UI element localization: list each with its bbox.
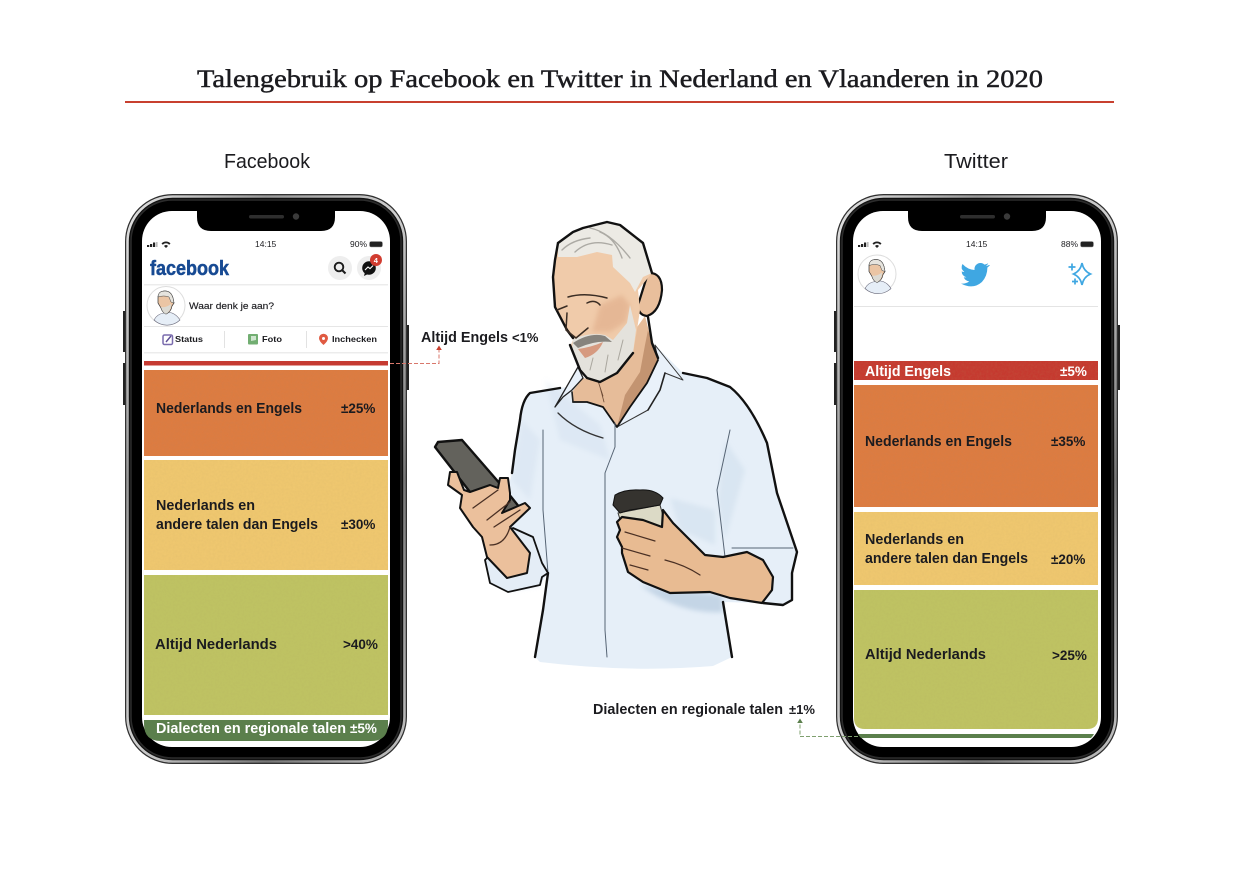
- heading: Twitter: Twitter: [944, 151, 1008, 173]
- bar: Nederlands en andere talen: ±20%: [1051, 552, 1085, 567]
- callout: Altijd Engels: <1%: [512, 330, 539, 345]
- phone: Facebook: [123, 194, 409, 764]
- status bar: 14:15: [255, 239, 277, 249]
- phone frame: [123, 194, 409, 764]
- action: Inchecken: [319, 334, 377, 345]
- bar: Altijd Engels: ±5%: [1060, 364, 1087, 379]
- shirt outline: [512, 373, 797, 657]
- icon: messenger with badge: 4: [374, 256, 379, 265]
- icon: sparkle: [1068, 263, 1090, 285]
- illustration: man with phone and coffee: [435, 222, 797, 669]
- bar: Altijd Nederlands: >25%: [1052, 648, 1087, 663]
- icon: messenger with badge: [357, 254, 382, 280]
- bar: Dialecten: Dialecten en regionale talen: [156, 721, 346, 737]
- bar: Altijd Nederlands: Altijd Nederlands: [865, 647, 986, 663]
- phone in hand: [435, 440, 520, 513]
- avatar: Facebook: [147, 286, 185, 325]
- bar: Altijd Engels: [144, 361, 388, 366]
- phone: Twitter: [834, 194, 1120, 764]
- status bar: [858, 239, 1094, 249]
- callout: Dialecten: [593, 702, 858, 736]
- action: Foto: Foto: [262, 334, 282, 344]
- title: Talengebruik op Facebook en Twitter in Nederland en Vlaanderen in 2020: [197, 66, 1043, 93]
- shirt: [485, 345, 797, 669]
- bar: Dialecten: [858, 734, 1094, 738]
- face outline: [553, 222, 658, 382]
- bar: Altijd Engels: Altijd Engels: [865, 364, 951, 380]
- shirt shading: [495, 380, 745, 612]
- eyes and nose: [557, 295, 607, 338]
- left hand: [448, 472, 530, 578]
- icon: search: [328, 256, 352, 280]
- bar: Nederlands en andere talen: andere talen dan Engels: [156, 517, 318, 533]
- action: Status: Status: [175, 334, 203, 344]
- bar: Nederlands en Engels: [144, 370, 388, 456]
- right hand and forearm: [617, 510, 773, 603]
- status bar: 14:15: [966, 239, 988, 249]
- bar: Nederlands en Engels: [854, 385, 1098, 507]
- action: Status: [163, 334, 203, 344]
- bar: Nederlands en Engels: ±25%: [341, 401, 375, 416]
- bar: Nederlands en andere talen: Nederlands en: [865, 532, 964, 548]
- head: [553, 222, 652, 382]
- bar: Nederlands en andere talen: andere talen dan Engels: [865, 551, 1028, 567]
- ear: [638, 273, 662, 316]
- bar: Altijd Engels: [854, 361, 1098, 380]
- status bar: 90%: [350, 239, 367, 249]
- bar: Nederlands en Engels: ±35%: [1051, 434, 1085, 449]
- neck skin: [572, 316, 658, 427]
- coffee cup: [613, 490, 665, 535]
- face shading: [592, 295, 630, 332]
- status bar: 88%: [1061, 239, 1078, 249]
- left cuff: [485, 528, 548, 592]
- phone frame: [834, 194, 1120, 764]
- callout: Altijd Engels: Altijd Engels: [421, 330, 508, 346]
- callout: Altijd Engels: [390, 330, 539, 364]
- icon: twitter bird: [961, 263, 990, 286]
- collar: [555, 345, 683, 438]
- bar: Dialecten: [144, 720, 388, 741]
- bar: Nederlands en andere talen: Nederlands en: [156, 498, 255, 514]
- bar: Nederlands en Engels: Nederlands en Engels: [156, 401, 302, 417]
- action: Foto: [248, 334, 282, 344]
- hair: [558, 222, 652, 292]
- callout: Dialecten: Dialecten en regionale talen: [593, 702, 783, 718]
- bar: Altijd Nederlands: [854, 590, 1098, 729]
- facebook logo: facebook: [150, 258, 230, 280]
- bar: Nederlands en andere talen: [144, 460, 388, 570]
- bar: Nederlands en Engels: Nederlands en Engels: [865, 434, 1012, 450]
- bar: Altijd Nederlands: Altijd Nederlands: [155, 637, 277, 653]
- beard: [572, 305, 636, 382]
- bar: Altijd Nederlands: >40%: [343, 637, 378, 652]
- callout: Dialecten: ±1%: [789, 702, 815, 717]
- bar: Altijd Nederlands: [144, 575, 388, 715]
- avatar: Twitter: [858, 255, 896, 294]
- action: Inchecken: Inchecken: [332, 334, 377, 344]
- status bar: [147, 239, 382, 249]
- bar: Nederlands en andere talen: [854, 512, 1098, 585]
- bar: Nederlands en andere talen: ±30%: [341, 517, 375, 532]
- bar: Dialecten: ±5%: [350, 721, 377, 736]
- heading: Facebook: Facebook: [224, 151, 311, 173]
- status prompt: Waar denk je aan?: [189, 301, 274, 312]
